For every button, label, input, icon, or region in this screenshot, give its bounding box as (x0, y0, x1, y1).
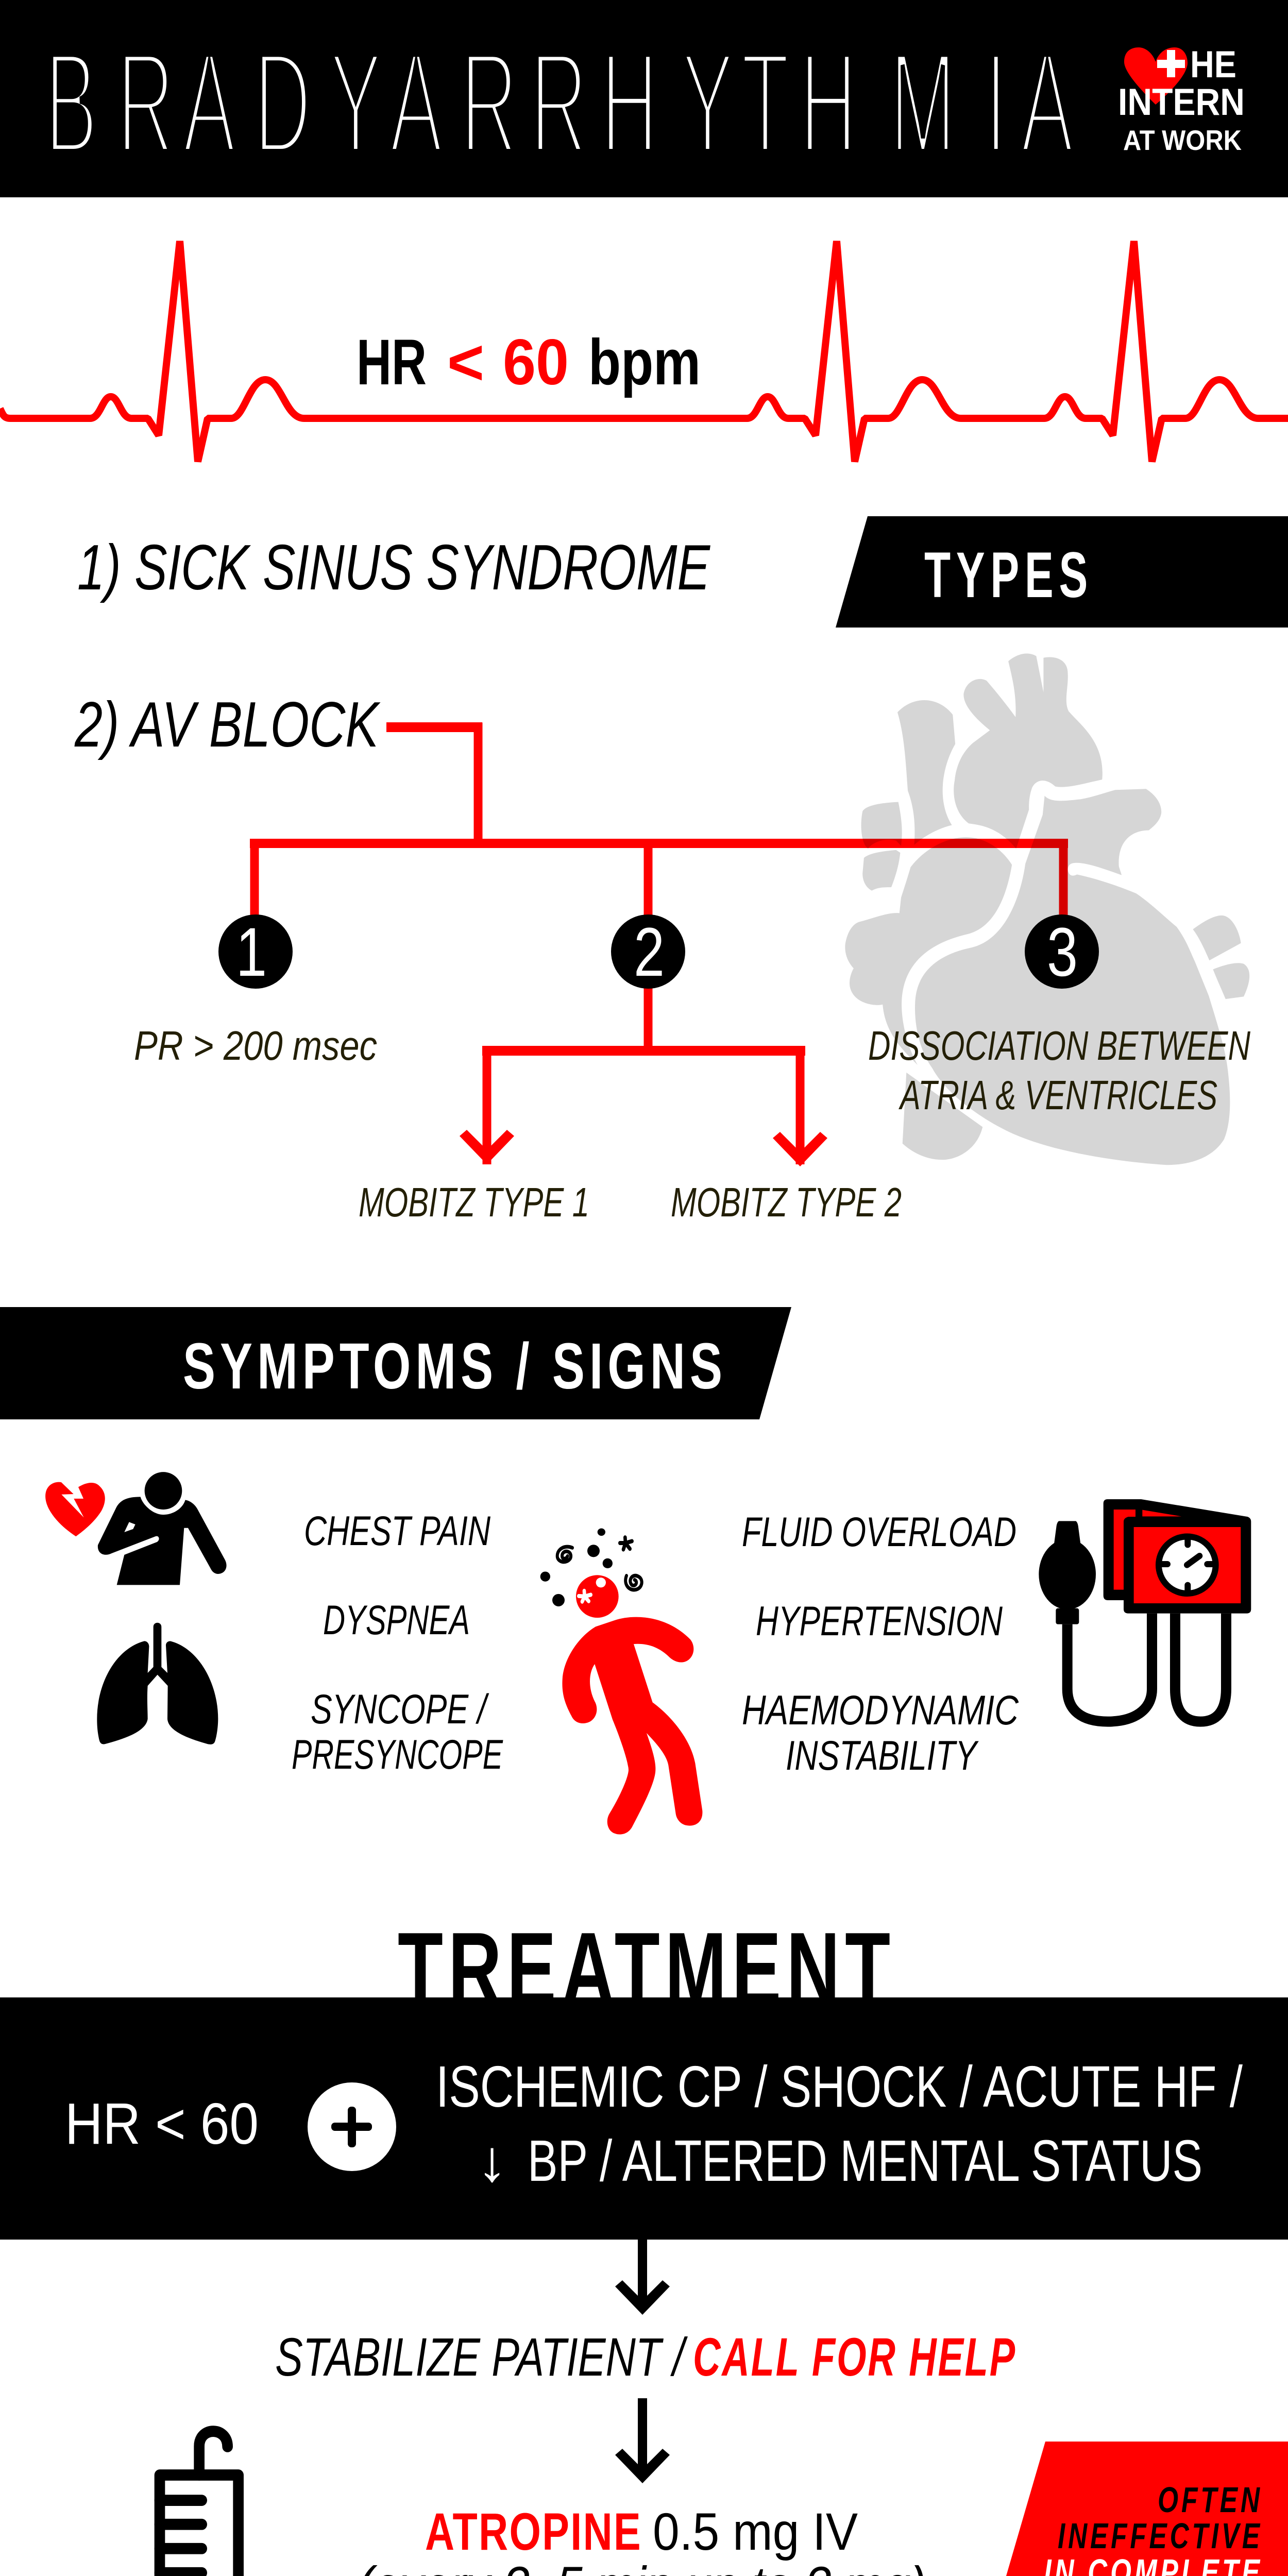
treatment heading: TREATMENT (398, 1911, 895, 2028)
signs list: HYPERTENSION (756, 1598, 1003, 1645)
arrow: to atropine (615, 2398, 670, 2483)
icon: iv bag (160, 2431, 239, 2576)
symptoms banner (0, 1307, 791, 1419)
atropine dosage (358, 2502, 926, 2576)
heart rate threshold: 60 (503, 327, 569, 398)
symptoms list: DYSPNEA (323, 1597, 470, 1643)
stabilize patient / call for help: STABILIZE PATIENT / (275, 2327, 688, 2387)
arrow: mobitz 1 (460, 1130, 514, 1164)
ECG trace (0, 241, 1288, 462)
header band (0, 0, 1288, 197)
criteria text: ↓ (477, 2128, 507, 2193)
heart rate threshold: HR (357, 327, 427, 398)
first degree description: PR > 200 msec (134, 1023, 377, 1069)
heart rate threshold: bpm (588, 327, 701, 398)
degree 1 badge: 1 (236, 914, 267, 991)
stabilize patient / call for help: CALL FOR HELP (693, 2327, 1016, 2387)
arrow: mobitz 2 (773, 1132, 827, 1166)
degree 3 badge: 3 (1047, 914, 1078, 991)
logo: the intern at work: AT WORK (1123, 124, 1242, 156)
types banner (836, 516, 1288, 628)
symptoms banner: SYMPTOMS / SIGNS (183, 1330, 727, 1402)
title: BRADYARRHYTHMIA (45, 22, 1074, 183)
icon: chest pain person with broken heart (45, 1472, 227, 1585)
heart silhouette (845, 654, 1249, 1165)
heart rate threshold (357, 327, 701, 398)
type 2: av block: 2) AV BLOCK (74, 689, 381, 760)
signs list (742, 1509, 1019, 1779)
signs list: FLUID OVERLOAD (742, 1509, 1016, 1555)
degree 2 badge (611, 914, 685, 991)
plus badge (308, 2082, 396, 2171)
degree 2 badge: 2 (634, 914, 665, 991)
degree 3 badge (1025, 914, 1099, 991)
icon: sphygmomanometer (1039, 1499, 1251, 1722)
hr under 60: HR < 60 (65, 2091, 259, 2156)
signs list: INSTABILITY (786, 1733, 979, 1779)
logo: the intern at work: HE (1190, 44, 1236, 86)
atropine dosage: 0.5 mg IV (653, 2502, 858, 2561)
symptoms list: CHEST PAIN (304, 1508, 490, 1554)
symptoms list (292, 1508, 503, 1778)
logo: the intern at work (1118, 44, 1245, 156)
callout: often ineffective (981, 2442, 1288, 2576)
symptoms list: SYNCOPE / (311, 1686, 489, 1733)
atropine dosage: ATROPINE (425, 2502, 642, 2561)
mobitz type 2: MOBITZ TYPE 2 (671, 1179, 902, 1225)
mobitz type 1: MOBITZ TYPE 1 (359, 1179, 589, 1225)
icon: lungs (97, 1623, 218, 1744)
degree 1 badge (218, 914, 293, 991)
signs list: HAEMODYNAMIC (742, 1687, 1019, 1734)
icon: dizzy figure (540, 1528, 702, 1835)
av block tree (250, 722, 1068, 1166)
heart rate threshold: < (447, 327, 484, 398)
criteria text (436, 2054, 1243, 2193)
types banner: TYPES (924, 539, 1093, 611)
logo: the intern at work: INTERN (1118, 81, 1245, 123)
third degree description (868, 1023, 1250, 1118)
arrow: to stabilize (615, 2240, 670, 2315)
symptoms list: PRESYNCOPE (292, 1732, 503, 1778)
type 1: sick sinus syndrome: 1) SICK SINUS SYNDROME (77, 532, 710, 603)
treatment criteria panel (0, 1997, 1288, 2240)
